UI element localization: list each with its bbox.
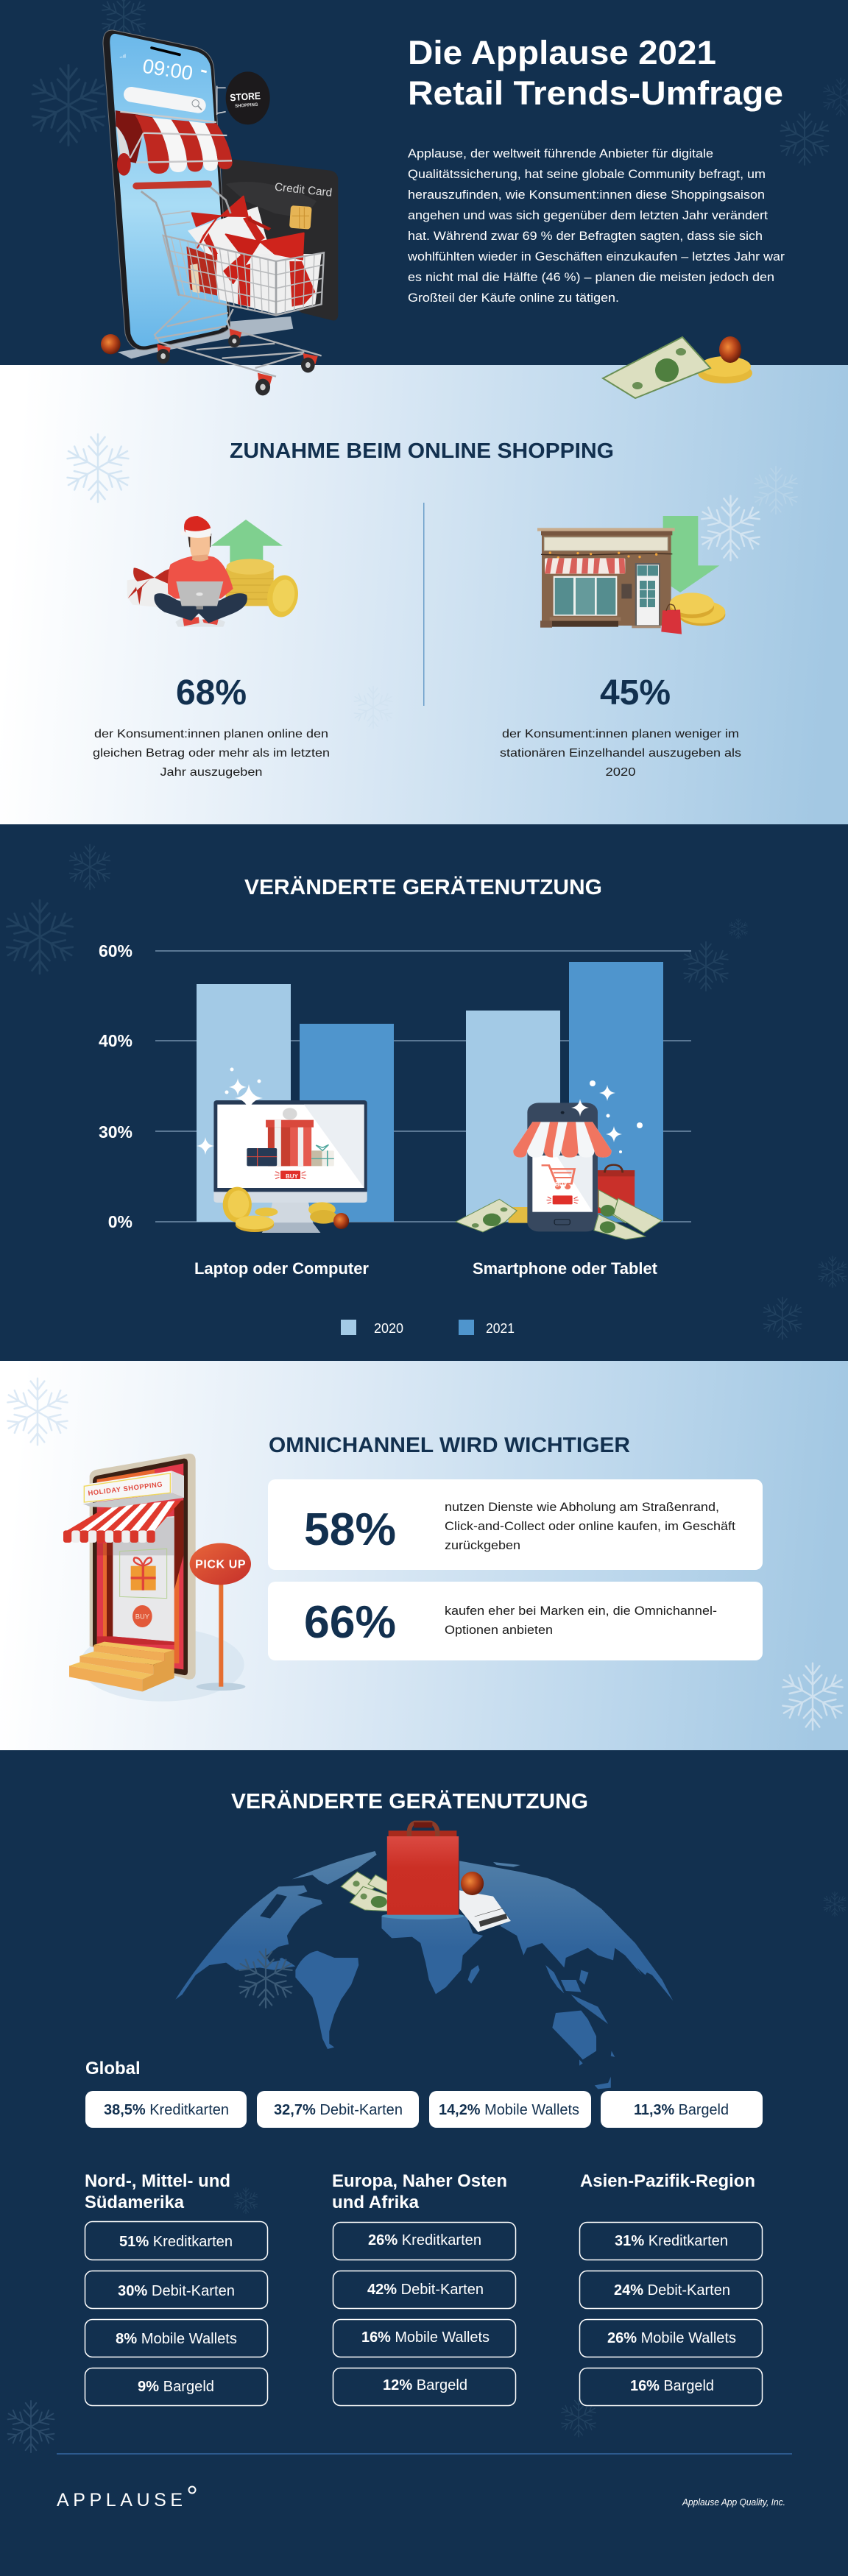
axis labels: 40% <box>99 1031 132 1050</box>
store sign: STORE <box>230 90 261 103</box>
card: 66 percent <box>268 1582 763 1660</box>
illustration: money and coins <box>603 336 752 398</box>
illustration: globe with shopping bag <box>175 1822 673 2089</box>
global payment chips <box>85 2091 763 2128</box>
intro text block: Applause, der weltweit führende Anbieter für digitale <box>408 146 713 160</box>
global payment chips: 11,3% Bargeld <box>634 2102 729 2118</box>
stat: 45 percent <box>500 673 741 779</box>
card text: nutzen Dienste wie Abholung am Straßenrand, <box>445 1501 719 1514</box>
region: Americas: 9% Bargeld <box>138 2379 214 2395</box>
bar chart: device usage <box>99 941 691 1278</box>
footer credit: Applause App Quality, Inc. <box>682 2497 785 2508</box>
panel: hero background <box>0 0 848 365</box>
region: EMEA <box>332 2171 515 2405</box>
region: Americas: 51% Kreditkarten <box>119 2234 233 2250</box>
phone: 09:00 <box>141 54 194 85</box>
region: Americas: 30% Debit-Karten <box>118 2283 235 2299</box>
legend: 2021 <box>486 1321 515 1336</box>
category labels: Laptop oder Computer <box>194 1259 369 1278</box>
axis labels: 60% <box>99 941 132 960</box>
intro text block: hat. Während zwar 69 % der Befragten sagten, dass sie sich <box>408 229 763 243</box>
illustration: retail store <box>537 516 725 634</box>
credit card <box>222 158 338 320</box>
stat: 68 percent: 68% <box>176 673 247 712</box>
title: Die Applause 2021 <box>408 34 716 71</box>
stat: 45 percent: 45% <box>600 673 671 712</box>
region: EMEA: 26% Kreditkarten <box>368 2232 481 2248</box>
intro text block: Großteil der Käufe online zu tätigen. <box>408 291 619 305</box>
awning <box>116 110 233 176</box>
floor shadow <box>118 316 293 358</box>
global payment chips: 32,7% Debit-Karten <box>274 2102 403 2118</box>
heading: payment: VERÄNDERTE GERÄTENUTZUNG <box>231 1789 588 1814</box>
continents <box>175 1851 673 2089</box>
illustration: phone storefront with shopping cart <box>101 30 338 395</box>
global payment chips: 14,2% Mobile Wallets <box>439 2102 579 2118</box>
region: EMEA: und Afrika <box>332 2193 420 2212</box>
sign <box>83 1493 184 1507</box>
stat description: Jahr auszugeben <box>160 766 262 779</box>
legend: 2020 <box>374 1321 403 1336</box>
panel: device usage background <box>0 824 848 1361</box>
card text: kaufen eher bei Marken ein, die Omnichannel- <box>445 1604 717 1618</box>
stat description: gleichen Betrag oder mehr als im letzten <box>93 747 330 760</box>
region: Americas: 8% Mobile Wallets <box>116 2331 237 2347</box>
global label: Global <box>85 2059 141 2078</box>
shopping bag <box>381 1913 464 1919</box>
illustration: holiday shopping pickup store <box>63 1454 251 1702</box>
region: APAC: 31% Kreditkarten <box>615 2233 728 2249</box>
category labels <box>194 1259 658 1278</box>
illustration: holiday shopping pickup store: PICK UP <box>195 1559 246 1571</box>
category labels: Smartphone oder Tablet <box>473 1259 658 1278</box>
global payment chips: 38,5% Kreditkarten <box>104 2102 229 2118</box>
illustration: holiday shopping pickup store: BUY <box>135 1613 150 1620</box>
region: APAC <box>580 2171 763 2405</box>
awning <box>63 1500 182 1533</box>
ornament <box>461 1872 484 1895</box>
intro text block: wohlfühlten wieder in Geschäften einzukaufen – letztes Jahr war <box>407 250 785 263</box>
region: EMEA: Europa, Naher Osten <box>332 2171 507 2191</box>
heading: omnichannel: OMNICHANNEL WIRD WICHTIGER <box>269 1434 630 1457</box>
stat description <box>500 728 741 779</box>
intro text block <box>407 146 785 305</box>
stat description: der Konsument:innen planen online den <box>94 728 328 740</box>
axis labels: 30% <box>99 1122 132 1142</box>
heading: device usage: VERÄNDERTE GERÄTENUTZUNG <box>244 875 602 899</box>
card: 58 percent: 58% <box>304 1504 396 1555</box>
intro text block: Qualitätssicherung, hat seine globale Community befragt, um <box>408 167 766 181</box>
gift boxes <box>186 197 322 314</box>
panel: online shopping background <box>0 365 848 824</box>
phone <box>103 30 230 350</box>
region: APAC: 26% Mobile Wallets <box>607 2330 736 2346</box>
steps <box>93 1642 174 1653</box>
intro text block: es nicht mal die Hälfte (46 %) – planen die meisten jedoch den <box>408 270 774 284</box>
region: EMEA: 42% Debit-Karten <box>367 2282 484 2298</box>
title: Retail Trends-Umfrage <box>408 74 783 112</box>
region: Americas: Südamerika <box>85 2193 185 2212</box>
card text <box>445 1501 735 1552</box>
title <box>408 34 783 112</box>
ornament <box>101 334 121 354</box>
stat description: 2020 <box>605 766 636 779</box>
card text: zurückgeben <box>445 1539 520 1552</box>
intro text block: herauszufinden, wie Konsument:innen diese Shoppingsaison <box>408 188 765 202</box>
region: Americas: Nord-, Mittel- und <box>85 2171 230 2191</box>
panel: omnichannel background <box>0 1361 848 1750</box>
legend <box>341 1320 515 1336</box>
receipt <box>459 1890 511 1932</box>
store sign <box>217 71 270 124</box>
shopping cart <box>136 184 324 395</box>
intro text block: angehen und was sich gegenüber dem letzten Jahr verändert <box>408 208 768 222</box>
logo: APPLAUSE <box>57 2490 183 2510</box>
card text: Click-and-Collect oder online kaufen, im Geschäft <box>445 1520 735 1533</box>
card: 58 percent <box>268 1479 763 1570</box>
region: EMEA: 12% Bargeld <box>383 2377 467 2393</box>
region: APAC: 24% Debit-Karten <box>614 2282 730 2299</box>
bills <box>341 1872 378 1899</box>
store sign: SHOPPING <box>235 102 258 109</box>
axis labels: 0% <box>108 1212 132 1231</box>
illustration: smartphone storefront with money <box>456 1080 662 1239</box>
stat: 68 percent <box>93 673 330 779</box>
region: APAC: Asien-Pazifik-Region <box>580 2171 755 2191</box>
illustration: computer with gifts: BUY <box>286 1173 299 1180</box>
axis labels <box>99 941 132 1231</box>
heading: online shopping: ZUNAHME BEIM ONLINE SHOPPING <box>230 439 614 463</box>
stat description <box>93 728 330 779</box>
illustration: holiday shopping pickup store: HOLIDAY SHOPPING <box>88 1481 163 1497</box>
card text <box>445 1604 717 1637</box>
panel: payment background <box>0 1750 848 2576</box>
region: APAC: 16% Bargeld <box>630 2378 714 2394</box>
region: Americas <box>85 2171 268 2405</box>
card: 66 percent: 66% <box>304 1597 396 1648</box>
stat description: stationären Einzelhandel auszugeben als <box>500 747 741 760</box>
region: EMEA: 16% Mobile Wallets <box>361 2329 490 2346</box>
illustration: person shopping online <box>127 516 301 627</box>
credit card: Credit Card <box>274 181 333 199</box>
pick up sign <box>197 1682 245 1691</box>
stat description: der Konsument:innen planen weniger im <box>502 728 739 740</box>
divider <box>423 503 424 706</box>
illustration: computer with gifts <box>197 1067 367 1233</box>
illustration: smartphone storefront with money: BUY <box>555 1181 568 1188</box>
card text: Optionen anbieten <box>445 1624 553 1637</box>
